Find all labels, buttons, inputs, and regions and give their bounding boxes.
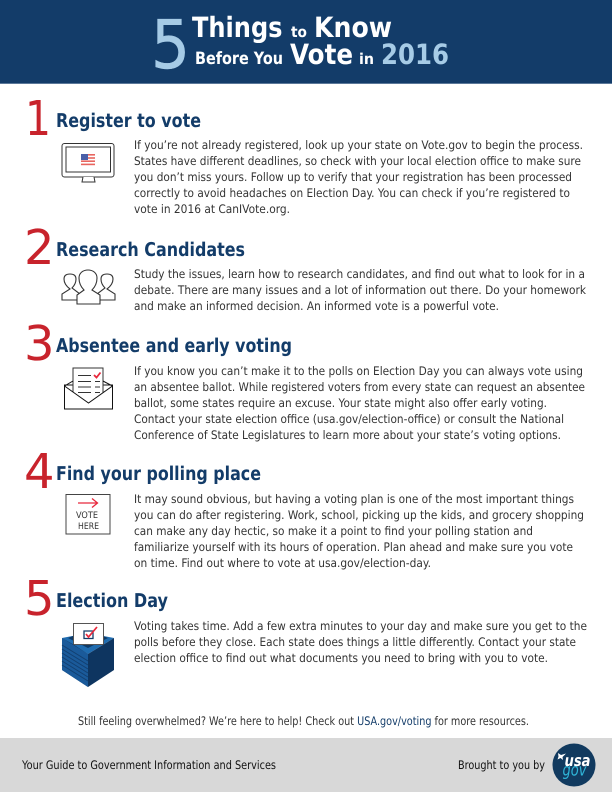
section 1: register to vote (25, 91, 583, 216)
icon: vote here sign: HERE (78, 522, 99, 532)
icon: vote here sign: VOTE (76, 511, 98, 521)
section 2: research candidates (24, 220, 586, 313)
heading: Register to vote (56, 110, 201, 132)
icon: group of people (62, 270, 115, 304)
heading: Research Candidates (56, 239, 245, 261)
body text: election office to find out what documents you need to bring with you to vote. (134, 651, 548, 665)
logo: usa gov: usa (564, 751, 590, 770)
body text: correctly to avoid headaches on Election Day. You can check if you’re registered to (134, 186, 570, 200)
logo: usa gov (552, 744, 596, 786)
number 3: 3 (24, 316, 55, 372)
body text (134, 364, 585, 442)
body text: Contact your state election office (usa.gov/election-office) or consult the National (134, 412, 564, 426)
icon: vote here sign (66, 494, 110, 534)
title: Vote (290, 38, 353, 71)
section 5: election day (24, 571, 587, 687)
title: 2016 (381, 38, 449, 71)
number 2: 2 (24, 220, 55, 276)
brought to you by: Brought to you by (458, 758, 545, 772)
body text: familiarize yourself with its hours of operation. Plan ahead and make sure you vote (134, 540, 573, 554)
closing note: Still feeling overwhelmed? We’re here to help! Check out USA.gov/voting for more resources. (78, 714, 529, 728)
number 5: 5 (24, 571, 55, 627)
body text (134, 138, 583, 216)
title: Before You (195, 49, 283, 69)
body text: on time. Find out where to vote at usa.gov/election-day. (134, 556, 431, 570)
body text: you don’t miss yours. Follow up to verify that your registration has been processed (134, 170, 572, 184)
title: in (359, 50, 374, 68)
title: Things (192, 11, 282, 44)
logo: usa gov: gov (562, 760, 587, 780)
section 3: absentee and early voting (24, 316, 585, 442)
title: to (291, 23, 307, 41)
footer tagline: Your Guide to Government Information and Services (21, 758, 276, 772)
title: 5 (151, 6, 190, 84)
body text: ballot, some states require an excuse. Your state might also offer early voting. (134, 396, 547, 410)
header banner (0, 0, 612, 84)
body text: It may sound obvious, but having a voting plan is one of the most important things (134, 492, 574, 506)
heading: Election Day (56, 590, 169, 612)
body text: Conference of State Legislatures to learn more about your state’s voting options. (134, 428, 561, 442)
footer band (0, 738, 612, 792)
heading: Absentee and early voting (56, 335, 292, 357)
icon: ballot box (62, 624, 114, 687)
number 4: 4 (24, 444, 55, 500)
heading: Find your polling place (56, 463, 261, 485)
section 4: find your polling place (24, 444, 584, 570)
icon: envelope with ballot (64, 368, 112, 409)
title: Know (314, 11, 392, 44)
icon: computer monitor with flag (62, 144, 114, 182)
body text (134, 619, 587, 665)
body text (134, 267, 586, 313)
body text (134, 492, 584, 570)
body text: vote in 2016 at CanIVote.org. (134, 202, 290, 216)
title (151, 6, 449, 84)
body text: can make any day hectic, so make it a point to find your polling station and (134, 524, 533, 538)
body text: and make an informed decision. An informed vote is a powerful vote. (134, 299, 499, 313)
number 1: 1 (25, 91, 51, 147)
